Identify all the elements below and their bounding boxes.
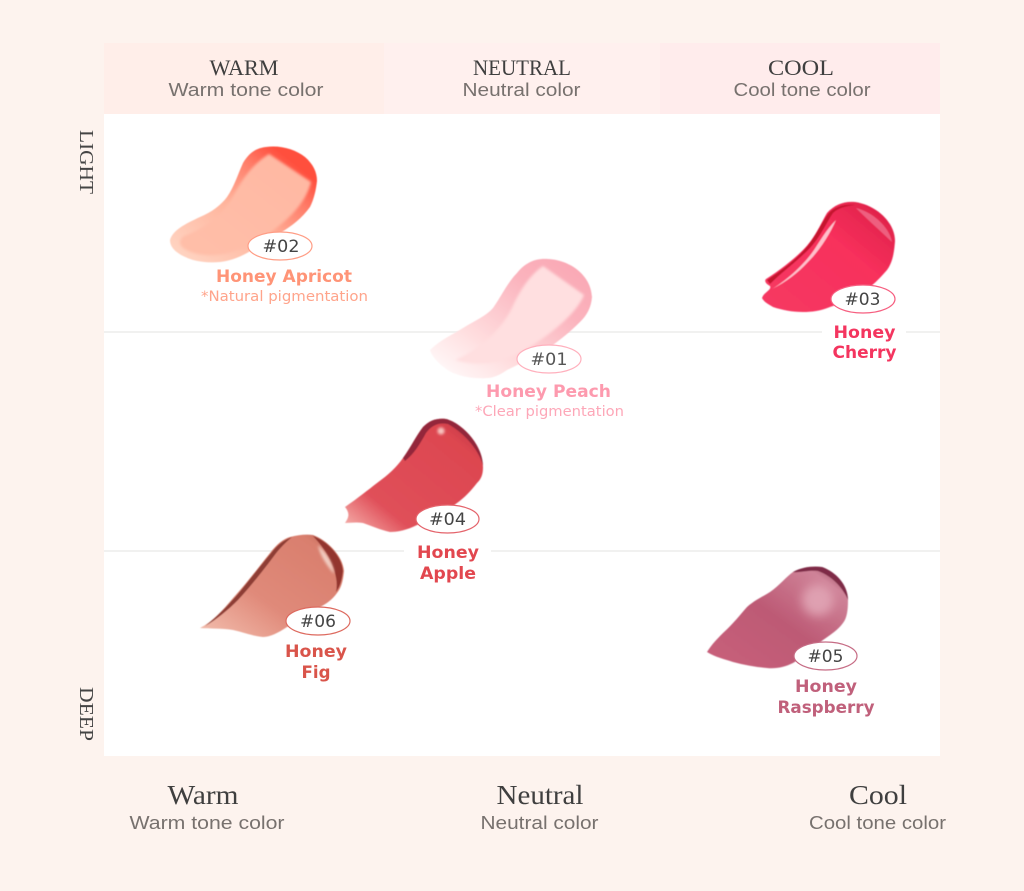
name: honey apple: Honey	[417, 543, 479, 563]
name: honey raspberry: Raspberry	[778, 698, 874, 718]
badge #04: #04	[429, 510, 466, 530]
header: cool: COOL	[768, 55, 834, 80]
swatch group: honey raspberry	[707, 567, 874, 718]
chart panel	[104, 114, 940, 756]
swatch: cherry smear	[762, 202, 895, 312]
axis label: light: LIGHT	[75, 130, 97, 194]
header: neutral: NEUTRAL	[473, 55, 571, 80]
header: cool	[660, 43, 940, 114]
legend: cool	[809, 780, 946, 833]
legend: neutral: Neutral	[496, 780, 584, 810]
bottom legend	[130, 780, 946, 833]
name: honey cherry: Honey	[834, 323, 896, 343]
name: honey raspberry: Honey	[795, 677, 857, 697]
swatch group: honey apricot	[170, 146, 368, 305]
name: honey apple	[417, 543, 479, 584]
header: warm: WARM	[210, 55, 278, 80]
swatch: peach smear	[430, 259, 592, 378]
name: honey apricot: *Natural pigmentation	[201, 289, 368, 305]
legend: neutral: Neutral color	[480, 813, 598, 833]
swatch group: honey cherry	[762, 202, 896, 363]
badge #02: #02	[262, 237, 300, 257]
legend: warm: Warm	[168, 780, 238, 810]
legend: neutral	[480, 780, 598, 833]
name: honey fig	[285, 642, 347, 683]
name: honey peach	[475, 382, 624, 420]
swatch: raspberry smear	[707, 567, 848, 668]
legend: cool: Cool	[849, 780, 907, 810]
name: honey raspberry	[778, 677, 874, 718]
header: neutral	[384, 43, 660, 114]
badge #05	[794, 642, 857, 670]
header: warm: Warm tone color	[168, 80, 324, 100]
name: honey fig: Fig	[302, 663, 330, 683]
swatch: apple smear	[345, 419, 483, 532]
badge #06	[286, 607, 350, 635]
legend: cool: Cool tone color	[809, 813, 946, 833]
swatch: fig smear	[200, 535, 344, 637]
badge #04	[416, 505, 479, 533]
badge #03: #03	[844, 290, 880, 310]
swatch group: honey peach	[430, 259, 624, 420]
badge #02	[248, 232, 312, 260]
name: honey cherry: Cherry	[832, 343, 896, 363]
badge #06: #06	[300, 612, 336, 632]
badge #05: #05	[808, 647, 844, 667]
name: honey apple: Apple	[420, 564, 476, 584]
header: neutral: Neutral color	[462, 80, 580, 100]
badge #01	[517, 345, 581, 373]
header: warm	[104, 43, 384, 114]
name: honey cherry	[832, 323, 896, 363]
legend: warm	[130, 780, 285, 833]
name: honey apricot: Honey Apricot	[216, 267, 352, 287]
swatch group: honey apple	[345, 419, 483, 584]
column headers	[104, 43, 940, 114]
header: cool: Cool tone color	[734, 80, 870, 100]
badge #01: #01	[530, 350, 568, 370]
name: honey fig: Honey	[285, 642, 347, 662]
swatch group: honey fig	[200, 535, 350, 683]
axis label: deep: DEEP	[75, 687, 97, 741]
name: honey apricot	[201, 267, 368, 305]
badge #03	[831, 285, 895, 313]
legend: warm: Warm tone color	[130, 813, 285, 833]
name: honey peach: Honey Peach	[486, 382, 611, 402]
name: honey peach: *Clear pigmentation	[475, 404, 624, 420]
swatch: apricot smear	[170, 146, 317, 262]
